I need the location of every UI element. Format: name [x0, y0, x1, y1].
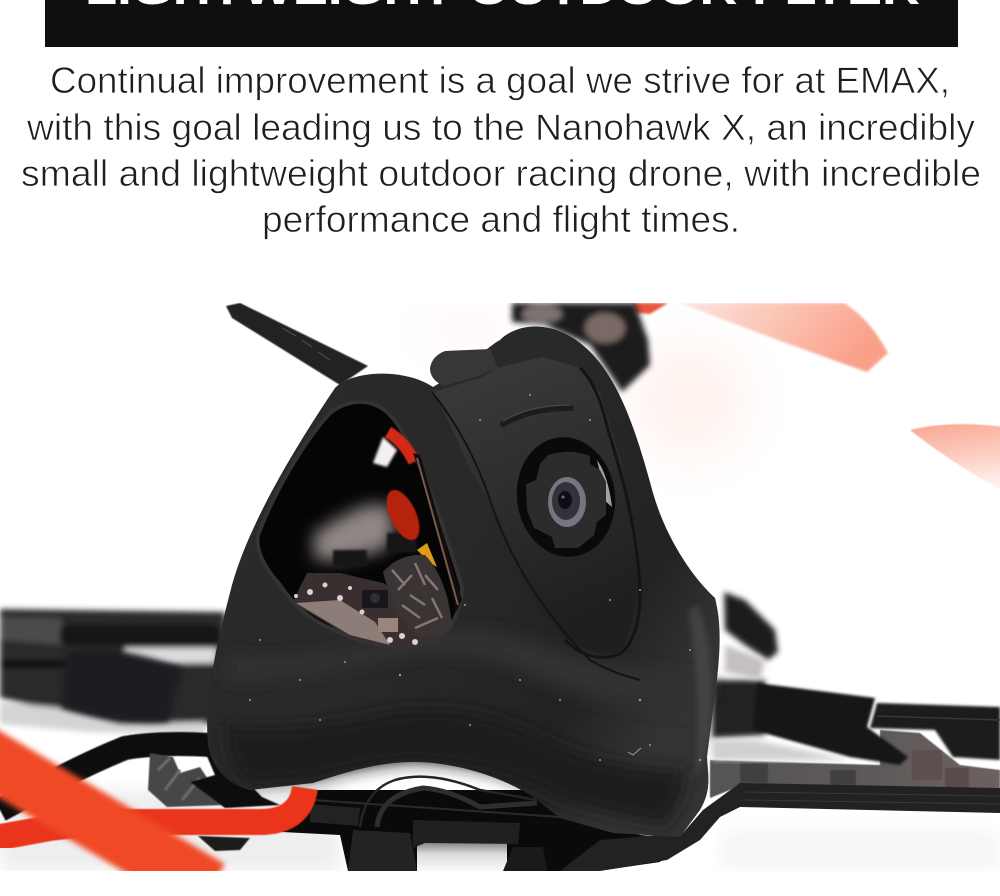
inner side wall: [413, 453, 462, 612]
arm edge strip: [560, 783, 1000, 871]
large blurred red wire: [0, 753, 210, 889]
left arm, blurred: [0, 609, 225, 735]
lower shell shadow: [225, 709, 686, 825]
intro text block: with this goal leading us to the Nanohawk X, an incredibly: [26, 107, 975, 148]
right arm: [560, 592, 1000, 871]
blurred back PCB: [313, 505, 395, 560]
red wire: [0, 788, 305, 838]
lens housing: [526, 452, 606, 548]
camera cover plate: [434, 357, 616, 468]
front opening: [257, 402, 462, 648]
bottom centre frame and wiring: [282, 777, 680, 871]
blurred rear motor: [512, 303, 650, 392]
foam padding: [383, 555, 453, 636]
red wire middle: [386, 489, 420, 541]
right sleeve: [753, 683, 908, 765]
raised bar on cover: [503, 408, 571, 424]
intro text block: small and lightweight outdoor racing drone, with incredible: [21, 153, 981, 194]
yellow connector: [417, 543, 437, 567]
camera: [516, 437, 616, 557]
red wire top: [388, 432, 414, 462]
canopy shell: [207, 326, 720, 837]
intro text block: [21, 60, 981, 240]
top vent tab: [430, 349, 498, 386]
surface dust specks: [249, 394, 701, 761]
right bracket: [724, 592, 778, 660]
antenna: [226, 303, 368, 385]
upper shell highlight band: [214, 632, 724, 698]
intro text block: Continual improvement is a goal we strive for at EMAX,: [50, 60, 950, 101]
black wire: [0, 744, 210, 810]
heading banner: [45, 0, 958, 47]
photo background: [0, 303, 1000, 871]
intro text block: performance and flight times.: [262, 199, 740, 240]
white gap: [373, 437, 397, 467]
circuit board: [294, 573, 438, 645]
right side highlight: [688, 605, 712, 780]
bottom band: [413, 820, 520, 848]
lower left carbon plate: [148, 747, 280, 851]
lens: [548, 477, 586, 527]
drone photo illustration: [0, 303, 1000, 871]
carbon fibre strip: [710, 730, 1000, 798]
right arm strands: [870, 703, 1000, 760]
bottom sleeve: [348, 830, 417, 871]
blurred propeller blades: [632, 303, 1000, 492]
left sleeve: [62, 649, 182, 722]
